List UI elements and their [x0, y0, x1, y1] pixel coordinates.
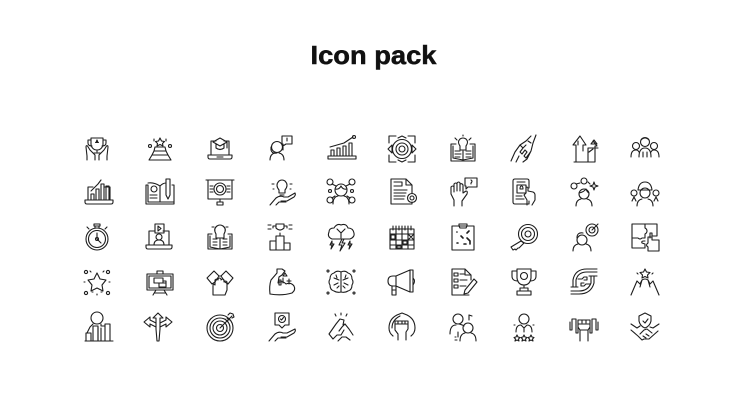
- icon: three hands together: [207, 271, 233, 295]
- icon: eye target with focus corners: [388, 136, 416, 162]
- icon: pyramid with star: [148, 138, 172, 160]
- icon: person with headset and speech bubble: [270, 136, 292, 160]
- icon: person with target: [573, 224, 598, 251]
- icon: book with bulb: [208, 225, 232, 249]
- icon: phone with touching hand: [513, 179, 535, 205]
- icon: person with connected circles: [327, 179, 355, 204]
- icon: clapping hands: [329, 313, 353, 341]
- icon: star with sparkles: [84, 270, 110, 295]
- icon: mountain with star: [631, 269, 659, 295]
- icon: handshake with shield: [631, 313, 659, 340]
- icon: open book with light bulb: [451, 135, 475, 161]
- icon: laptop with bar chart: [85, 180, 113, 204]
- icon: checklist with pencil: [452, 269, 477, 295]
- icon: megaphone: [388, 270, 414, 295]
- icon: target with arrow: [207, 313, 234, 341]
- icon: three direction arrows: [144, 313, 172, 341]
- icon: calendar board: [390, 226, 414, 249]
- icon: laptop with video tutor: [146, 224, 172, 249]
- icon: document with badge: [391, 179, 416, 204]
- icon: key with target: [511, 224, 538, 250]
- icon: raised hand with question bubble: [451, 178, 477, 206]
- icon: laptop with graduation cap: [208, 138, 232, 159]
- icon: two people: [450, 314, 476, 341]
- icon: open book with pencil: [146, 179, 174, 204]
- icon: fist holding dumbbell: [570, 319, 598, 341]
- icon: rising bar chart: [328, 136, 356, 159]
- title: Icon pack: [310, 40, 437, 70]
- icon: house with upward arrows: [573, 136, 598, 162]
- icon: raised fist in circle: [389, 313, 415, 340]
- icon: flexed bicep with arrows: [270, 269, 295, 295]
- icon: hand holding light bulb: [270, 180, 295, 205]
- icon: podium with trophy: [268, 224, 292, 250]
- icon: person with stars: [514, 314, 534, 341]
- icon grid: [84, 135, 659, 341]
- icon: person pushing ball over bars: [85, 312, 113, 341]
- icon: worker with check and settings circles: [631, 182, 659, 206]
- icon: tactics clipboard: [452, 224, 474, 250]
- icon: puzzle pieces: [632, 224, 659, 251]
- icon: presentation board: [206, 180, 234, 205]
- icon: group of three people: [631, 138, 659, 157]
- icon: trophy: [512, 269, 536, 295]
- icon: presentation with chat bubbles: [147, 271, 173, 295]
- icon: hand with check bubble: [269, 313, 295, 341]
- icon: stopwatch: [86, 224, 108, 250]
- icon: brain with sparkles: [327, 270, 355, 294]
- icon: brain cloud with lightning: [328, 224, 354, 251]
- icon: person with idea symbols: [571, 178, 598, 206]
- icon: trophy held in hands: [86, 138, 108, 160]
- icon: reaching hands: [511, 135, 536, 162]
- icon: hands in circular arrows: [571, 269, 597, 294]
